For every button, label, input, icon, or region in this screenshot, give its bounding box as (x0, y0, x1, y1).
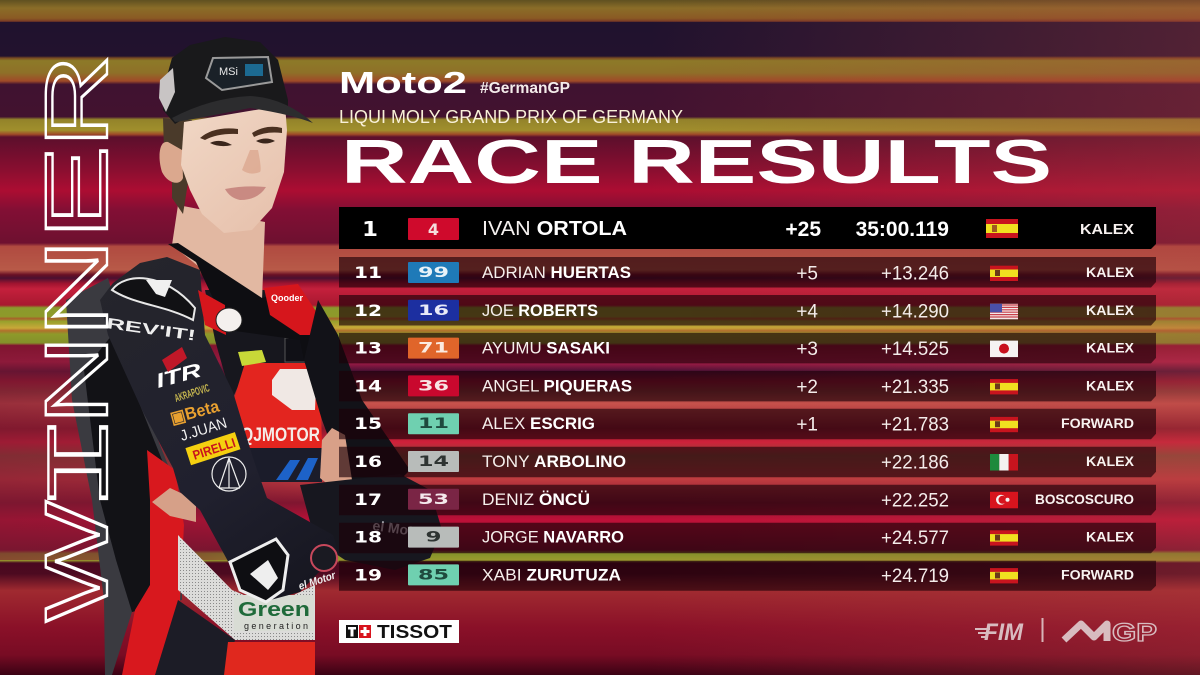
row: 14 Piqueras (339, 371, 1156, 401)
mouth (225, 186, 266, 200)
row: 16 Arbolino: 14 (418, 454, 449, 470)
row: 13 Sasaki: 13 (354, 339, 382, 358)
row: 11 Huertas (339, 257, 1156, 288)
sponsor Green: generation (244, 621, 308, 631)
row: 17 Oncu: BOSCOSCURO (1035, 491, 1134, 507)
row: 16 Arbolino: KALEX (1086, 453, 1135, 469)
row: 14 Piqueras: +21.335 (881, 377, 949, 398)
row: 11 Huertas: 99 (418, 265, 449, 281)
row: 18 Navarro (339, 523, 1156, 553)
vertical outlined word WINNER: N (26, 335, 126, 425)
row: 12 Roberts: +4 (796, 301, 818, 322)
rider main arm (100, 257, 338, 602)
row: 14 Piqueras: KALEX (1086, 377, 1135, 393)
row: 15 Escrig: +1 (796, 415, 818, 436)
Moto2 logo and hashtag (339, 65, 570, 100)
sponsor Pirelli: PIRELLI (191, 435, 237, 463)
Tissot logo (339, 620, 459, 643)
rider neck (172, 205, 265, 300)
winner row: 1 (362, 217, 378, 241)
sponsor shoulder logo: Qooder (271, 293, 303, 303)
chest QJ logo (272, 369, 316, 410)
row: 18 Navarro: 18 (354, 528, 382, 547)
row: 12 Roberts: KALEX (1086, 302, 1135, 318)
row: 12 Roberts: 16 (418, 303, 449, 319)
rider hand under arm (152, 488, 196, 522)
row: 14 Piqueras: +2 (796, 377, 818, 398)
rider upper chest dark (205, 290, 322, 400)
row: 12 Roberts: 12 (354, 301, 382, 320)
row: 19 Zurutuza: 85 (418, 567, 449, 583)
sponsor el Motorista: el Motor (297, 570, 338, 593)
row: 19 Zurutuza (339, 561, 1156, 591)
cap patch (206, 57, 272, 90)
row: 16 Arbolino: +22.186 (881, 452, 949, 474)
row: 19 Zurutuza: 19 (354, 565, 382, 584)
rider portrait (66, 37, 442, 675)
hair behind ear (163, 118, 192, 214)
row: 17 Oncu: 53 (418, 492, 449, 508)
row: 19 Zurutuza: FORWARD (1061, 566, 1134, 582)
sponsor glove: el Moto (372, 517, 422, 540)
vertical outlined word WINNER: E (26, 145, 126, 240)
row: 16 Arbolino: TONY ARBOLINO (482, 452, 626, 471)
elbow helmet logo (311, 545, 337, 571)
sponsor Akrapovic: AKRAPOVIC (173, 382, 211, 405)
row: 11 Huertas: +5 (796, 264, 818, 284)
row: 15 Escrig: 11 (418, 416, 449, 432)
vertical outlined word WINNER: I (33, 410, 134, 515)
winner row: KALEX (1080, 221, 1134, 238)
rider far arm (304, 300, 410, 482)
blue logo on suit (276, 458, 318, 480)
sponsor Beta: ▣Beta (168, 396, 222, 428)
number chip 4: 4 (428, 220, 439, 239)
divider (1042, 618, 1044, 642)
hashtag: #GermanGP (480, 80, 570, 97)
row: 18 Navarro: KALEX (1086, 529, 1135, 545)
sponsor red mark (162, 347, 187, 372)
sponsor green sticker (238, 350, 266, 366)
row: 14 Piqueras: ANGEL PIQUERAS (482, 376, 632, 395)
row: 11 Huertas: KALEX (1086, 264, 1135, 280)
row: 15 Escrig: +21.783 (881, 415, 949, 436)
row: 17 Oncu: +22.252 (881, 490, 949, 511)
sponsor J.Juan: J.JUAN (178, 415, 229, 445)
rider lower suit red (224, 642, 315, 675)
rider abdomen panel (248, 448, 322, 482)
number chip 4 (408, 218, 459, 240)
sponsor Green: Green (238, 599, 310, 621)
rider glove (300, 474, 442, 570)
rider mesh panel (178, 535, 315, 640)
row: 16 Arbolino (339, 447, 1156, 477)
row: 17 Oncu (339, 485, 1156, 515)
row: 15 Escrig: FORWARD (1061, 415, 1134, 431)
rider hand on arm (320, 428, 352, 486)
elbow puck (230, 539, 288, 602)
shoulder puck (112, 278, 195, 320)
row: 17 Oncu: DENIZ ÖNCÜ (482, 490, 590, 509)
cap crown (163, 37, 288, 124)
cap brim (172, 96, 313, 123)
rider right shoulder (264, 284, 325, 335)
vertical outlined word WINNER: N (26, 238, 126, 338)
row: 13 Sasaki: 71 (418, 341, 449, 357)
sponsor bomb logo (216, 308, 242, 332)
FIM logo: FIM (984, 619, 1024, 646)
audio technica logo (212, 457, 246, 491)
winner row: +25 (785, 218, 821, 241)
MotoGP logo: GP (1112, 619, 1157, 647)
winner row: IVAN ORTOLA (482, 218, 627, 240)
sponsor ITR: ITR (154, 359, 204, 393)
vertical outlined word WINNER: R (26, 54, 126, 148)
row: 14 Piqueras: 14 (354, 376, 382, 395)
eyes (210, 138, 275, 146)
face (181, 105, 287, 233)
rider lower suit dark (155, 600, 235, 675)
row: 12 Roberts (339, 295, 1156, 326)
vertical outlined word WINNER: W (26, 501, 126, 622)
row: 13 Sasaki: +14.525 (881, 339, 949, 360)
row: 11 Huertas: 11 (354, 263, 382, 282)
Tissot logo: TISSOT (377, 622, 452, 642)
row: 15 Escrig: 15 (354, 414, 382, 433)
cap patch: MSi (219, 66, 238, 78)
rider red leg stripe (122, 450, 184, 675)
arm red stripe (198, 290, 226, 335)
row: 14 Piqueras: 36 (418, 378, 449, 394)
cap side logo (159, 68, 175, 112)
Moto2 logo: Moto2 (339, 65, 467, 100)
row: 16 Arbolino: 16 (354, 452, 382, 471)
row: 15 Escrig (339, 409, 1156, 439)
winner row (339, 207, 1156, 249)
sponsor MSI sticker (285, 338, 317, 362)
row: 11 Huertas: ADRIAN HUERTAS (482, 263, 631, 282)
sponsor QJMOTOR: QJMOTOR (241, 425, 320, 446)
winner row: 35:00.119 (856, 218, 949, 241)
rider collar (168, 243, 335, 360)
sponsor REVIT: REV'IT! (105, 315, 197, 344)
row: 13 Sasaki: +3 (796, 339, 818, 360)
row: 19 Zurutuza: XABI ZURUTUZA (482, 565, 621, 584)
row: 18 Navarro: +24.577 (881, 528, 949, 549)
eyebrows (200, 127, 282, 140)
row: 19 Zurutuza: +24.719 (881, 566, 949, 587)
row: 12 Roberts: JOE ROBERTS (482, 301, 598, 320)
flag Spain (986, 219, 1018, 238)
sponsor Green (234, 595, 314, 631)
row: 18 Navarro: 9 (426, 530, 442, 546)
title: RACE RESULTS (341, 128, 1052, 197)
MotoGP logo (1064, 619, 1157, 647)
rider chest (233, 363, 322, 450)
nose (242, 150, 261, 174)
row: 17 Oncu: 17 (354, 490, 382, 509)
ear (160, 142, 183, 183)
row: 15 Escrig: ALEX ESCRIG (482, 414, 595, 433)
rider head (159, 37, 313, 233)
row: 11 Huertas: +13.246 (881, 264, 949, 284)
rider back and hip (66, 278, 182, 675)
row: 12 Roberts: +14.290 (881, 301, 949, 322)
rider lower side panel (84, 335, 178, 612)
vertical outlined word WINNER (26, 54, 134, 622)
row: 13 Sasaki: AYUMU SASAKI (482, 339, 610, 358)
event name: LIQUI MOLY GRAND PRIX OF GERMANY (339, 107, 683, 127)
row: 13 Sasaki: KALEX (1086, 340, 1135, 356)
row: 18 Navarro: JORGE NAVARRO (482, 528, 624, 547)
row: 13 Sasaki (339, 333, 1156, 363)
